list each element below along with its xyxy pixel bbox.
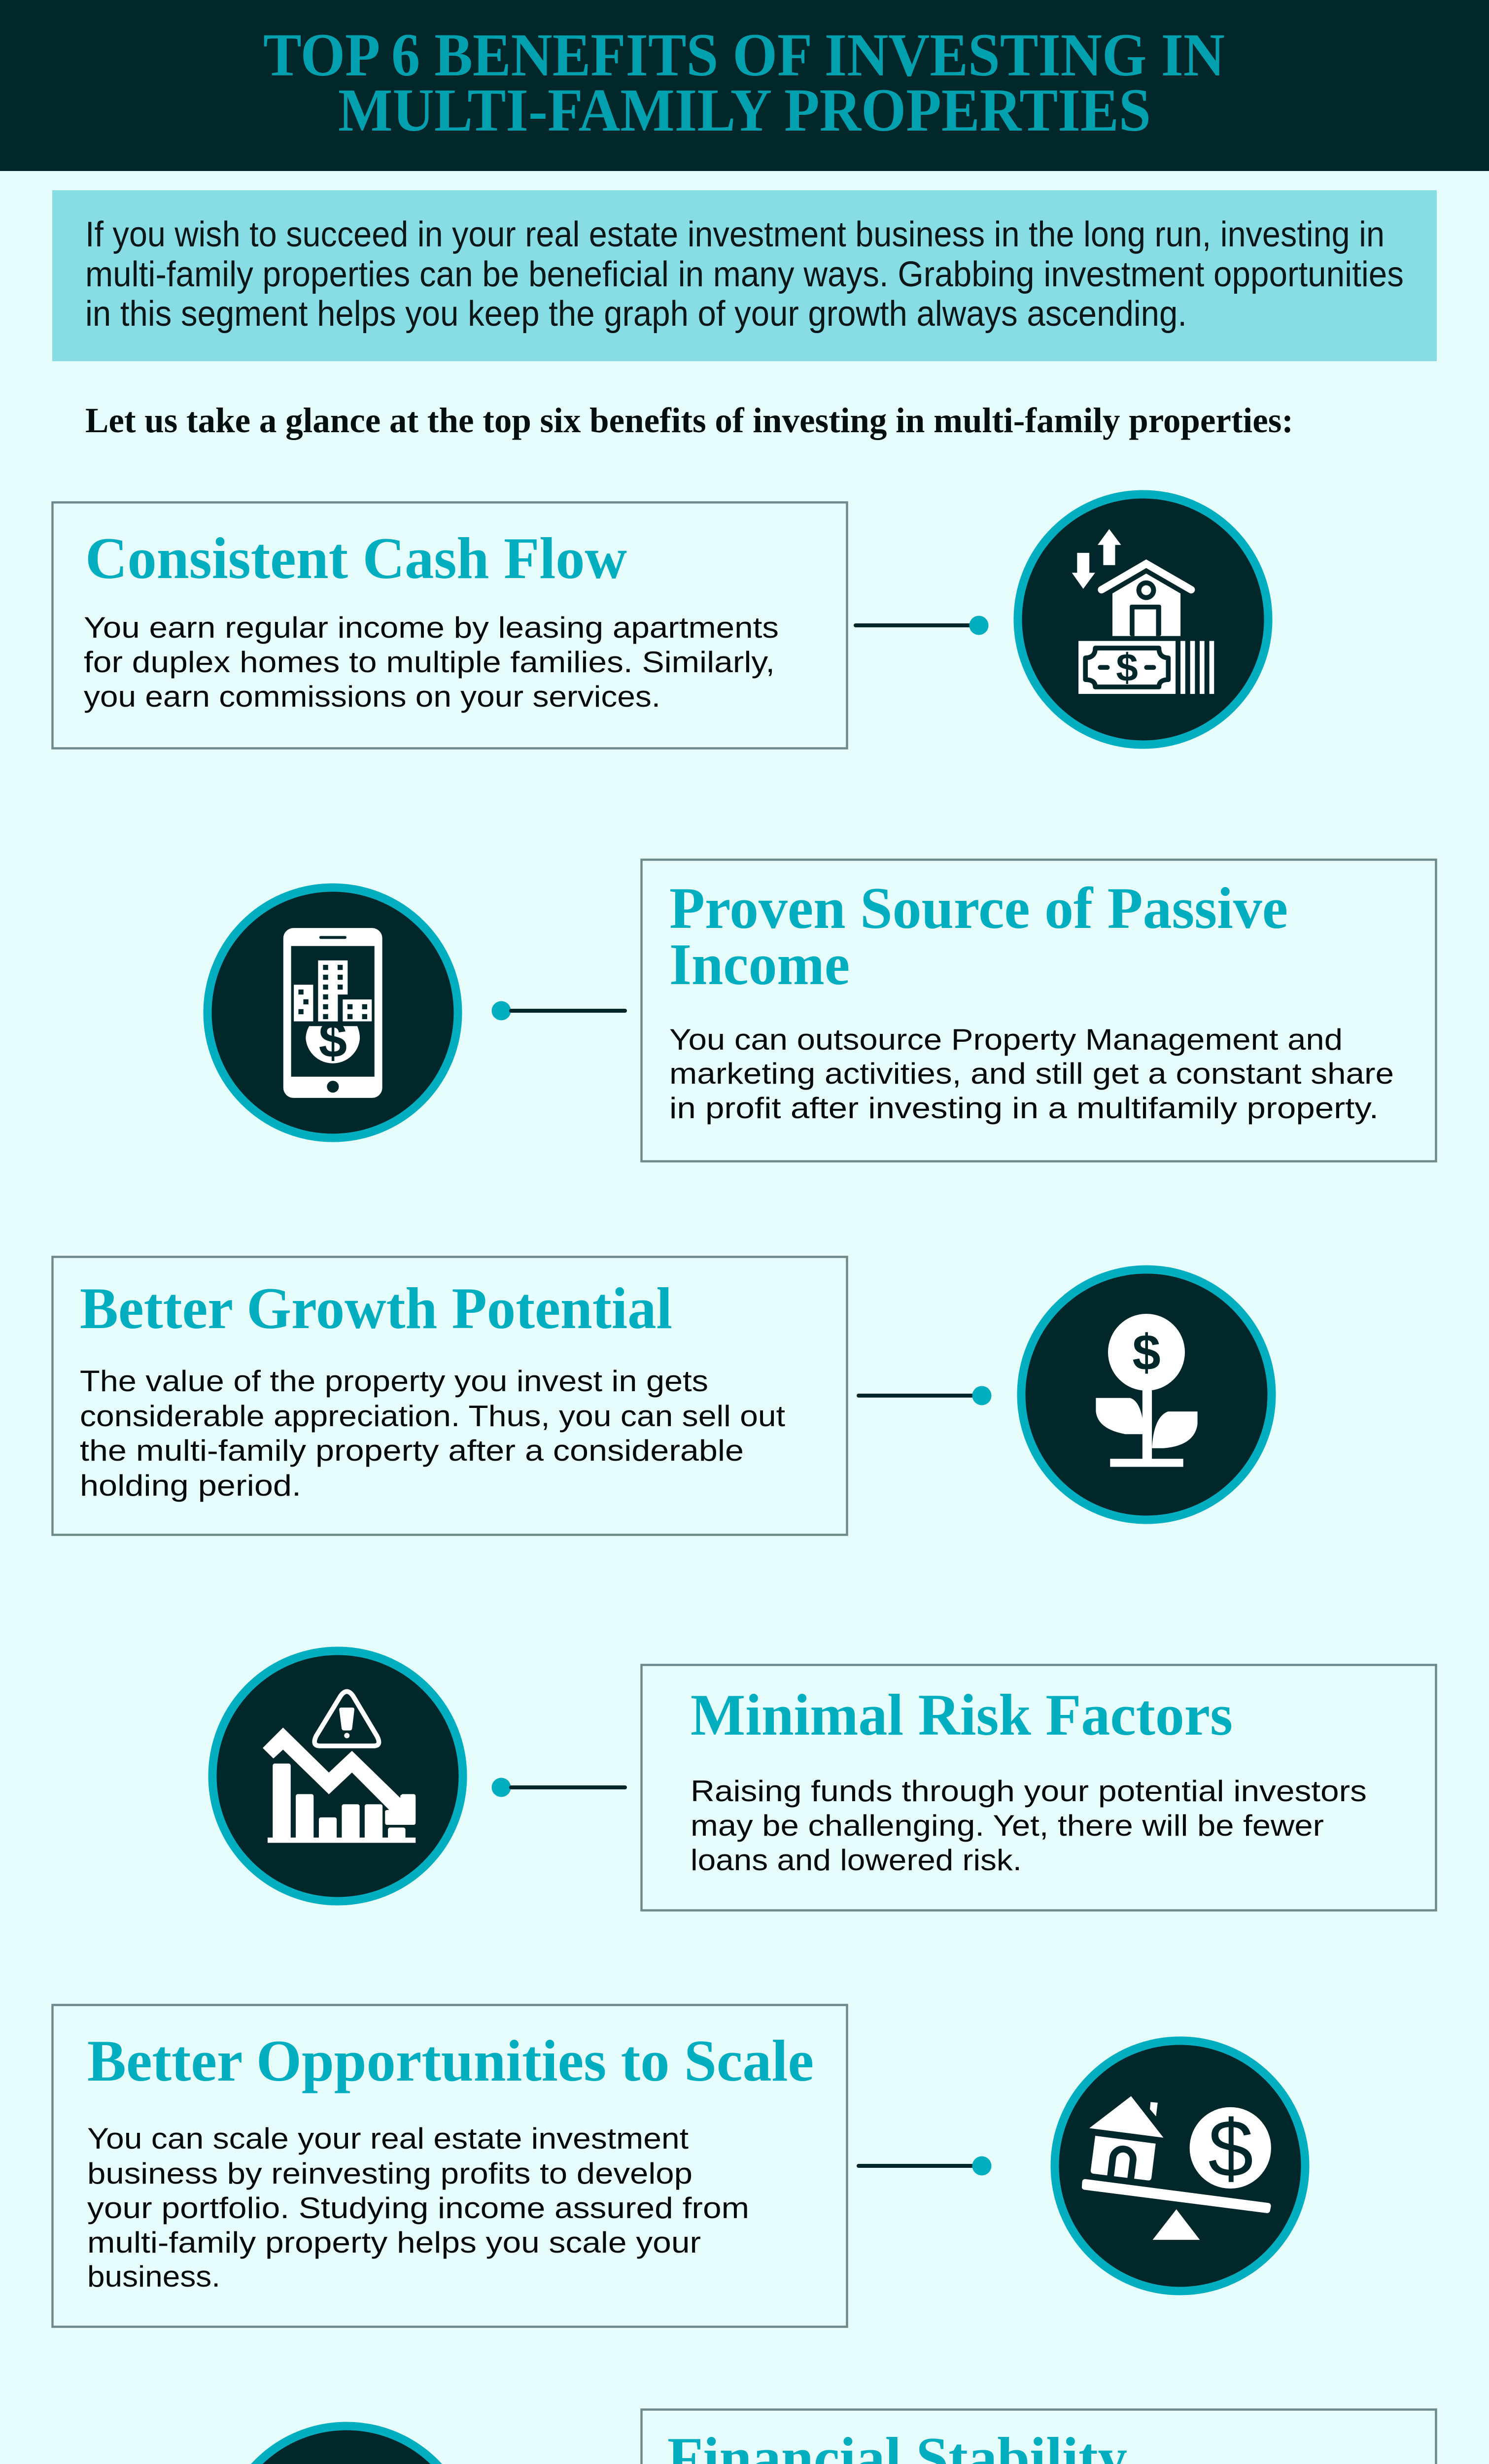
intro text: If you wish to succeed in your real estate investment business in the long run, investing in xyxy=(85,215,1385,254)
icon: house and money xyxy=(1018,494,1268,745)
body text xyxy=(84,611,779,713)
body text: business. xyxy=(87,2260,220,2293)
panel: proven source of passive income xyxy=(642,859,1436,1161)
title: MULTI-FAMILY PROPERTIES xyxy=(338,76,1151,144)
body text: multi-family property helps you scale your xyxy=(87,2226,701,2259)
connector 2 xyxy=(492,1001,625,1020)
subheading: Let us take a glance at the top six benefits of investing in multi-family properties: xyxy=(85,401,1293,440)
panel: minimal risk factors xyxy=(642,1665,1436,1910)
body text xyxy=(87,2122,749,2293)
body text xyxy=(691,1775,1367,1877)
panel: consistent cash flow xyxy=(52,503,847,748)
intro text xyxy=(85,215,1404,334)
icon: money plant: $ xyxy=(1132,1324,1161,1381)
icon: phone with buildings xyxy=(208,888,458,1138)
icon: banknote with shield xyxy=(221,2426,472,2464)
body text: your portfolio. Studying income assured from xyxy=(87,2191,749,2224)
icon: house and money: $ xyxy=(1116,646,1138,689)
body text: considerable appreciation. Thus, you can sell out xyxy=(80,1400,785,1433)
body text: You earn regular income by leasing apartments xyxy=(84,611,779,644)
body text: You can scale your real estate investment xyxy=(87,2122,689,2155)
panel: better growth potential xyxy=(52,1257,847,1535)
body text: in profit after investing in a multifamily property. xyxy=(669,1092,1379,1125)
intro text: in this segment helps you keep the graph of your growth always ascending. xyxy=(85,294,1187,334)
body text: Raising funds through your potential investors xyxy=(691,1775,1367,1808)
connector 1 xyxy=(856,616,989,635)
body text: The value of the property you invest in gets xyxy=(80,1365,708,1398)
icon: money plant xyxy=(1021,1269,1272,1520)
icon: house and dollar balance xyxy=(1055,2041,1305,2291)
header band with title xyxy=(0,0,1489,171)
connector 4 xyxy=(492,1778,625,1797)
title: TOP 6 BENEFITS OF INVESTING IN xyxy=(263,21,1225,89)
body text: the multi-family property after a considerable xyxy=(80,1434,744,1467)
icon: falling chart with warning xyxy=(212,1651,463,1901)
connector 3 xyxy=(859,1386,992,1405)
panel: better opportunities to scale xyxy=(52,2005,847,2327)
body text: you earn commissions on your services. xyxy=(84,680,660,713)
intro panel xyxy=(52,190,1437,361)
body text: marketing activities, and still get a constant share xyxy=(669,1057,1394,1090)
body text: may be challenging. Yet, there will be fewer xyxy=(691,1809,1324,1842)
body text xyxy=(80,1365,785,1502)
body text: You can outsource Property Management and xyxy=(669,1023,1343,1056)
body text xyxy=(669,1023,1394,1125)
body text: holding period. xyxy=(80,1469,301,1502)
icon: phone with buildings: $ xyxy=(319,1011,347,1068)
heading: Minimal Risk Factors xyxy=(691,1682,1233,1747)
icon: house and dollar balance: $ xyxy=(1208,2103,1253,2193)
heading xyxy=(669,875,1288,997)
body text: for duplex homes to multiple families. Similarly, xyxy=(84,646,775,679)
heading: Income xyxy=(669,931,850,997)
heading: Better Growth Potential xyxy=(80,1275,672,1341)
connector 5 xyxy=(859,2156,992,2175)
heading: Better Opportunities to Scale xyxy=(87,2028,814,2093)
heading: Consistent Cash Flow xyxy=(85,525,627,591)
body text: business by reinvesting profits to develop xyxy=(87,2157,693,2190)
panel: financial stability xyxy=(642,2410,1436,2464)
body text: loans and lowered risk. xyxy=(691,1844,1022,1877)
heading: Proven Source of Passive xyxy=(669,875,1288,941)
title xyxy=(263,21,1225,144)
intro text: multi-family properties can be beneficial in many ways. Grabbing investment opportunities xyxy=(85,255,1404,294)
